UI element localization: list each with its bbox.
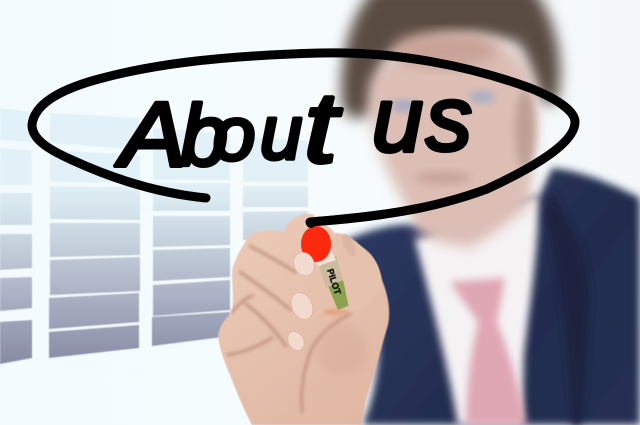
handwritten heading: A: [115, 83, 186, 186]
red marker tip: [301, 226, 331, 262]
neck: [410, 165, 530, 248]
handwritten heading: b: [180, 88, 228, 184]
lower fingernail: [285, 329, 307, 353]
handwritten heading: o: [213, 92, 255, 177]
middle fingernail: [287, 289, 317, 323]
marker ink blob: [306, 218, 316, 228]
face side shadow: [515, 90, 535, 170]
finger shadows: [228, 246, 350, 412]
face: [369, 38, 537, 237]
barrel print: PILOT: [325, 268, 343, 296]
handwritten heading: t: [304, 72, 342, 184]
hair: [341, 0, 560, 118]
suit jacket: [345, 168, 640, 425]
hand base: [218, 214, 389, 425]
marker barrel: [318, 256, 350, 310]
barrel body: [318, 256, 350, 310]
bar chart grid: [0, 108, 308, 364]
barrel label: [318, 256, 343, 288]
handwritten ellipse stroke: [32, 53, 575, 222]
top fingernail: [290, 249, 318, 279]
mouth: [415, 171, 471, 185]
left eye: [391, 100, 417, 112]
handwritten heading: s: [426, 68, 472, 170]
suit lapel shadow: [545, 190, 590, 425]
white shirt: [415, 195, 538, 425]
pink necktie: [450, 278, 526, 425]
handwritten heading: u: [260, 91, 302, 176]
handwritten heading: u: [372, 69, 423, 171]
marker stroke end: [310, 208, 420, 222]
palm shadow: [316, 324, 368, 376]
right eye: [469, 91, 495, 103]
thumbnail: [339, 232, 359, 258]
handwritten heading: [115, 68, 472, 186]
marker collar: [314, 252, 336, 266]
orange reflection near marker: [323, 309, 347, 315]
thumb over marker: [334, 234, 382, 312]
blurred businessman: [341, 0, 640, 425]
forehead shade: [393, 32, 497, 68]
hand holding marker: [218, 214, 389, 425]
